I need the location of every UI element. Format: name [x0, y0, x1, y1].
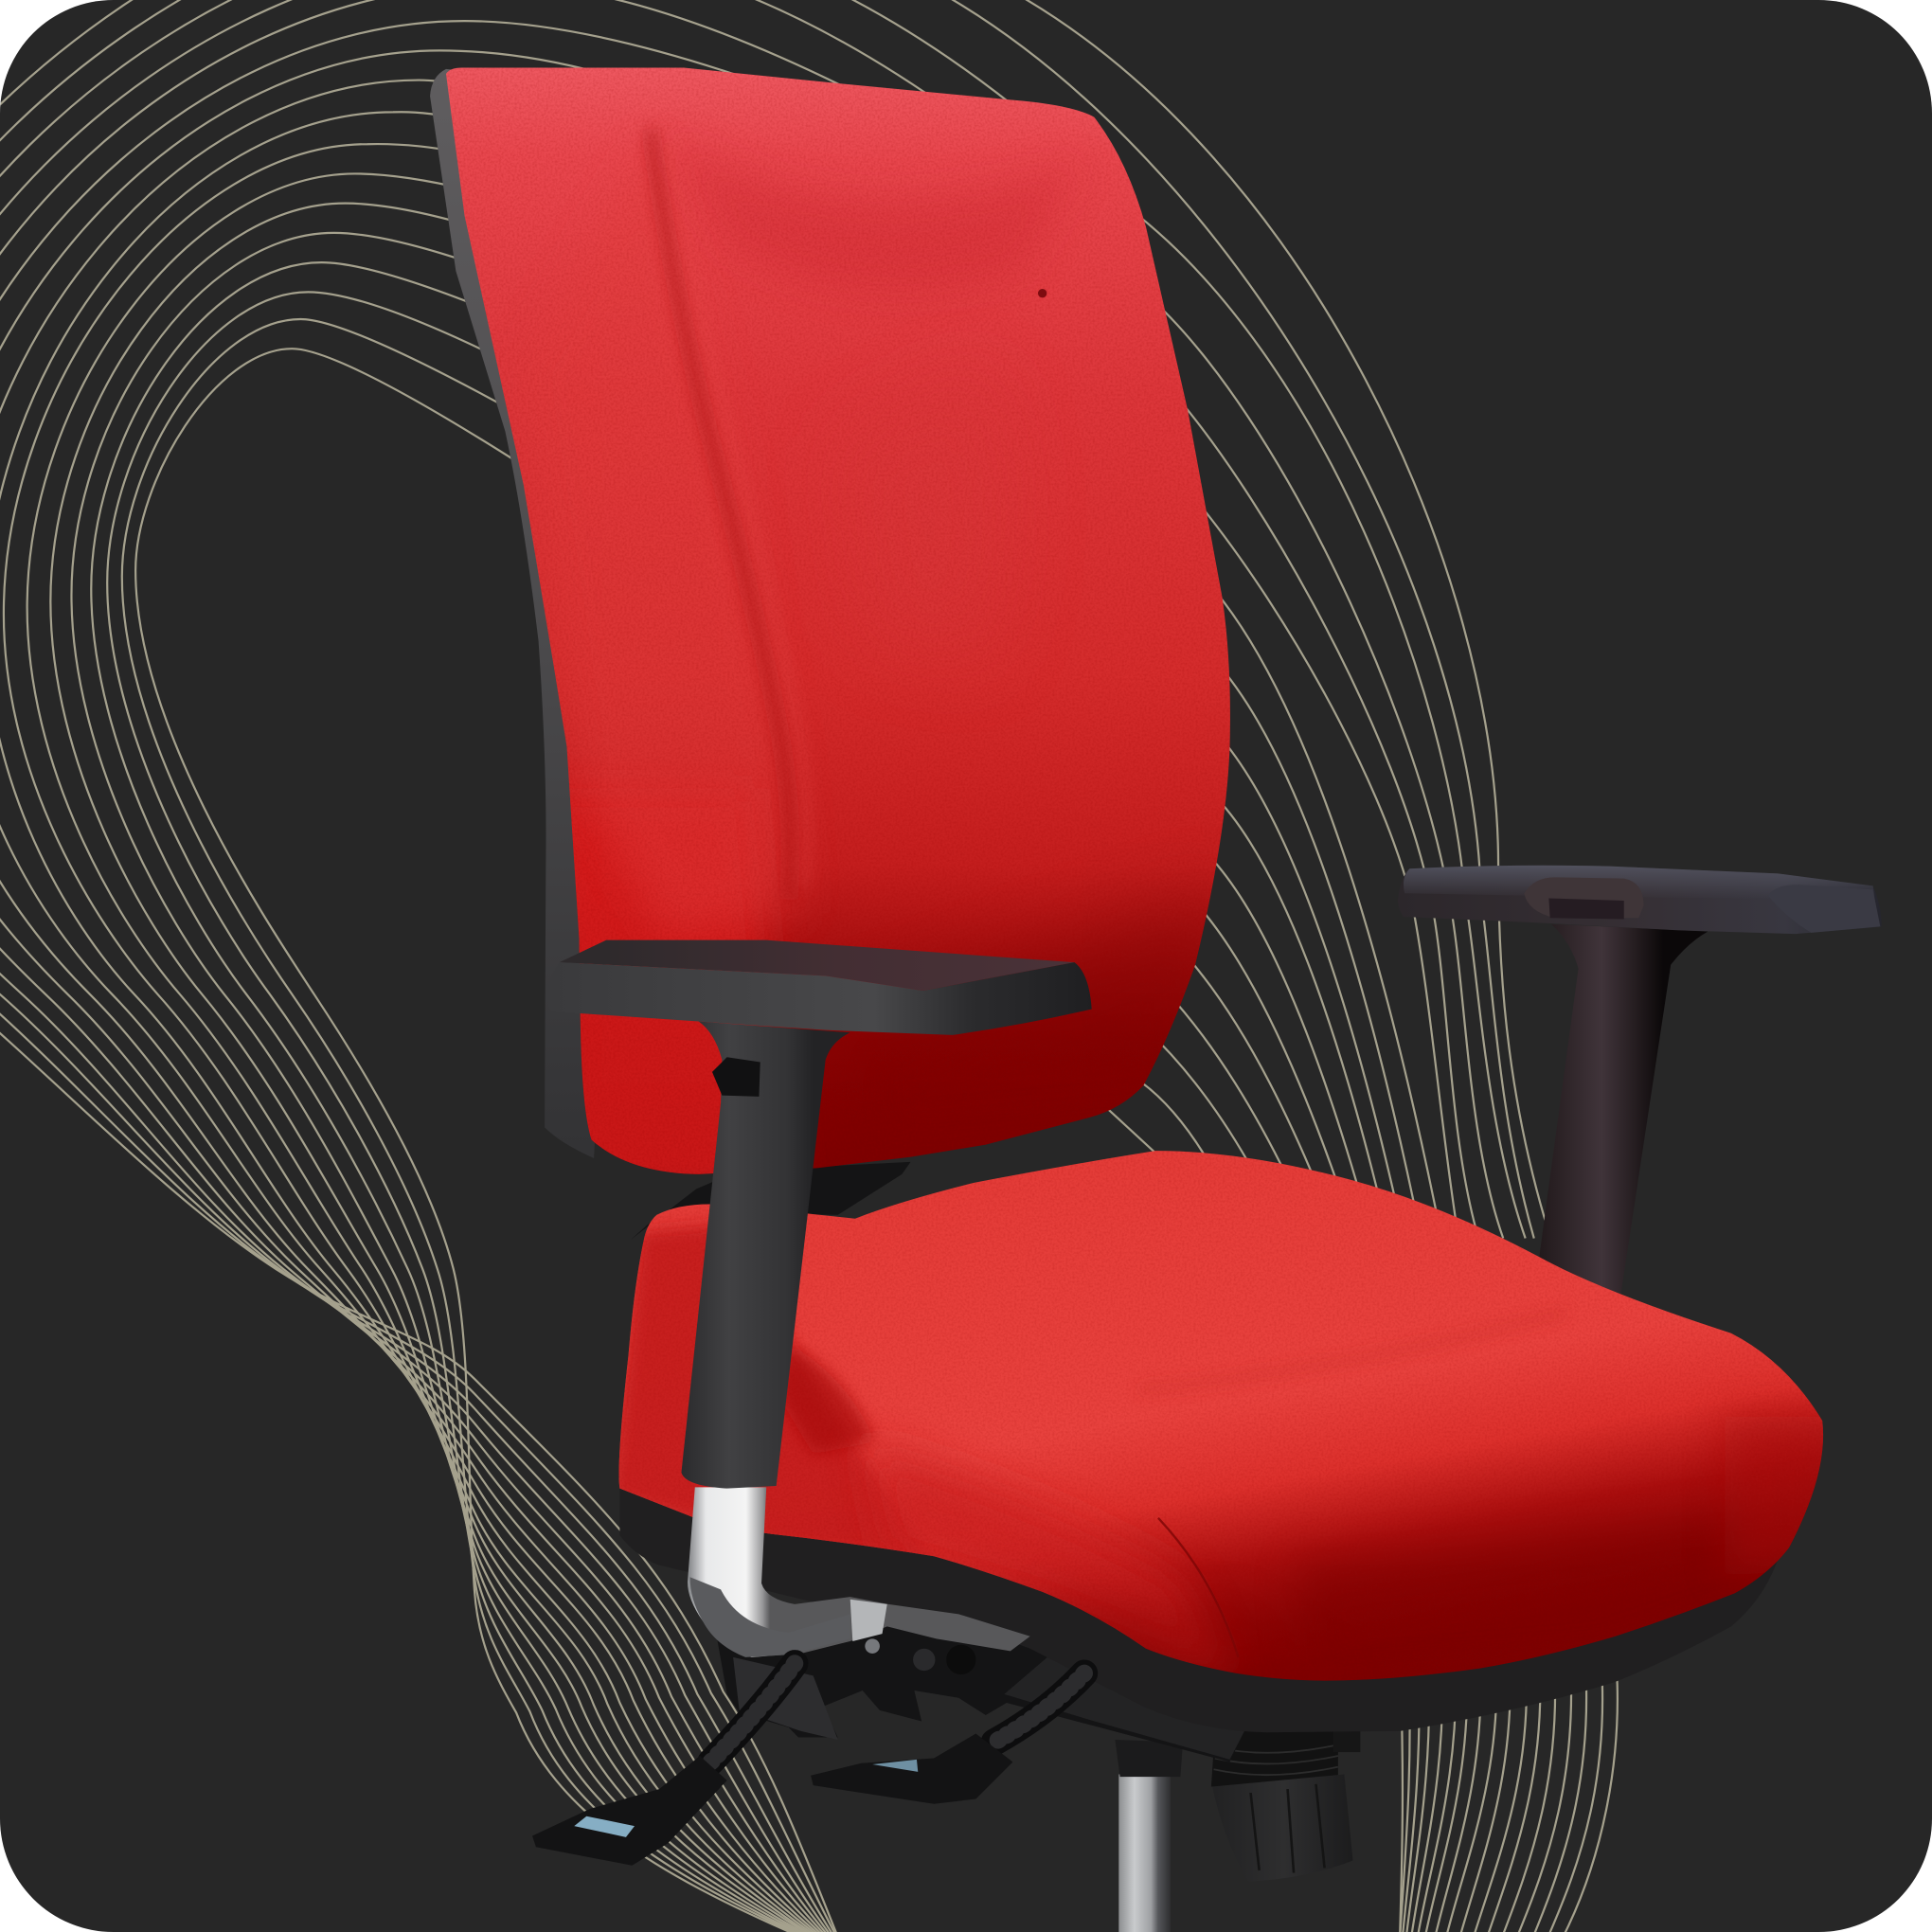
seat mechanism plate [717, 1614, 1244, 1762]
seat upholstery [604, 1139, 1836, 1688]
rear armrest [1398, 866, 1882, 1306]
left height lever [532, 1663, 795, 1866]
backrest bracket [631, 1162, 910, 1240]
adjustment catch [712, 1057, 760, 1097]
backrest black rim [430, 68, 595, 1158]
front armrest [548, 940, 1092, 1489]
armrest pad top [560, 940, 1074, 991]
chrome arm bracket [688, 1487, 1030, 1657]
armrest post [681, 1022, 850, 1489]
backrest upholstery [446, 68, 1230, 1174]
armrest pad front [548, 962, 1092, 1035]
gas lift stem [1115, 1740, 1183, 1932]
seat base trim [619, 1528, 1777, 1732]
right tilt lever [811, 1673, 1084, 1804]
tension knob [1211, 1730, 1360, 1882]
